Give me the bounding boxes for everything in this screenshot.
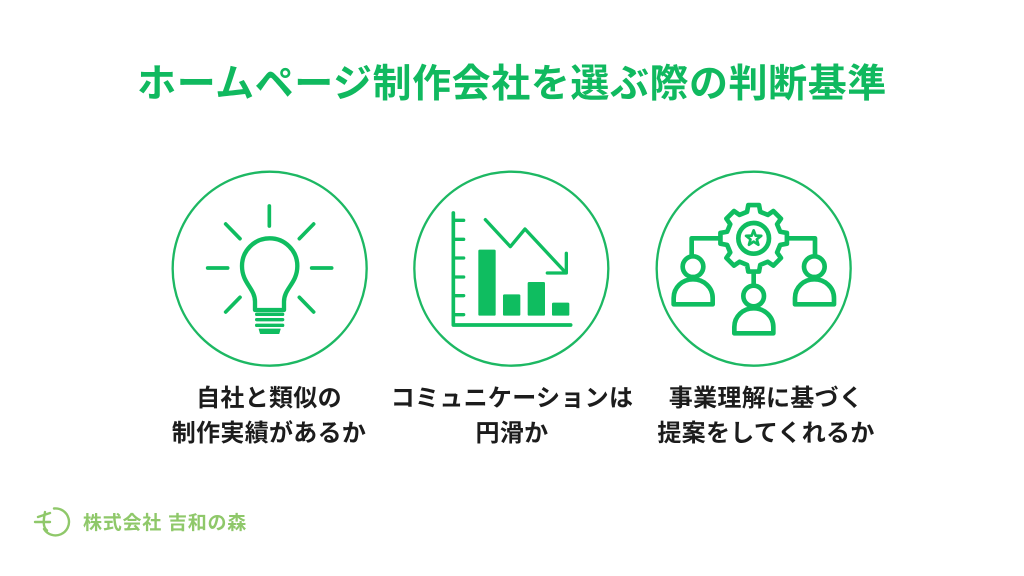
- label: criterion 2: 円滑か: [476, 420, 548, 447]
- icon: gear and people in circle: [657, 172, 851, 366]
- icon: declining bar chart in circle: [414, 172, 608, 366]
- icon: company logo mark: [35, 508, 69, 535]
- label: criterion 2: [391, 385, 633, 447]
- label: criterion 3: 提案をしてくれるか: [657, 420, 875, 447]
- company name: 株式会社 吉和の森: [83, 513, 247, 534]
- label: criterion 3: [657, 385, 875, 447]
- label: criterion 1: 制作実績があるか: [172, 420, 366, 447]
- label: criterion 2: コミュニケーションは: [391, 385, 633, 412]
- label: criterion 3: 事業理解に基づく: [669, 385, 863, 412]
- label: criterion 1: [172, 385, 366, 447]
- title: ホームページ制作会社を選ぶ際の判断基準: [137, 63, 887, 106]
- label: criterion 1: 自社と類似の: [196, 385, 342, 412]
- icon: light bulb in circle: [173, 172, 367, 366]
